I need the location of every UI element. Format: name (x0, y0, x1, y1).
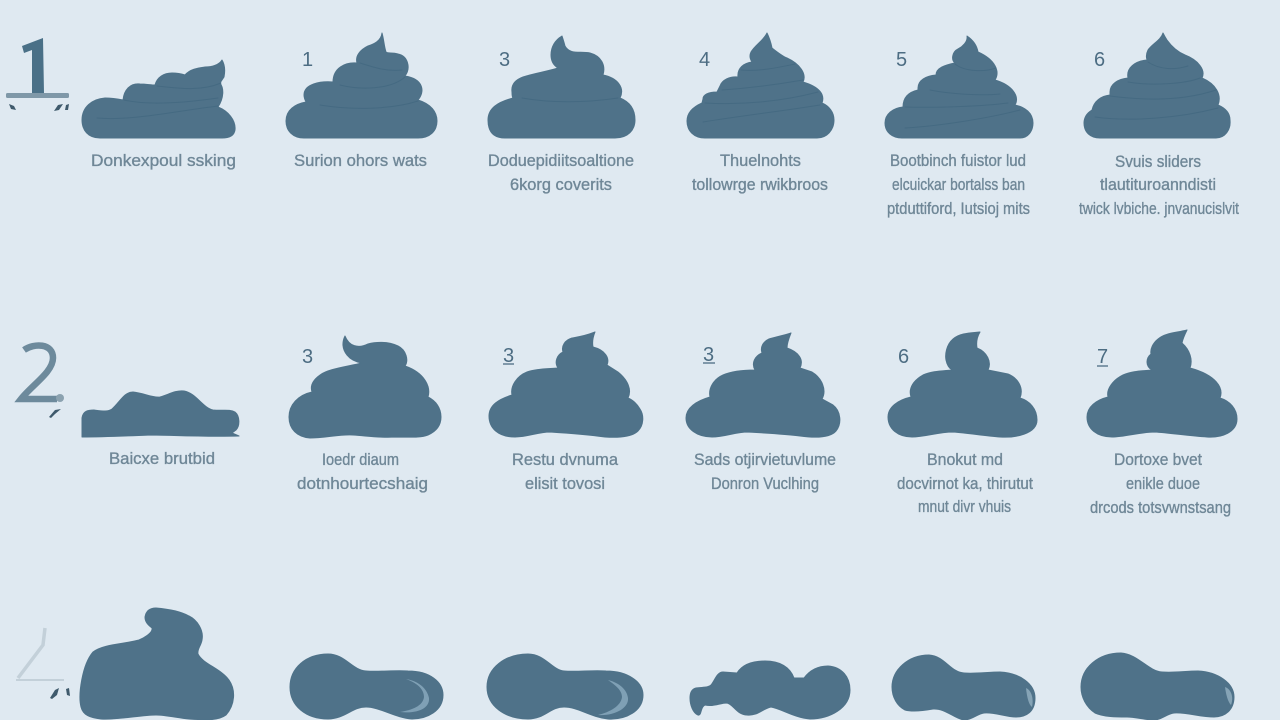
label: 6korg coverits (510, 175, 612, 194)
label (488, 151, 634, 194)
label (512, 450, 619, 493)
number: 5 (896, 49, 907, 71)
label (692, 151, 828, 194)
shape: flat mound (82, 391, 239, 437)
label: tollowrge rwikbroos (692, 175, 828, 194)
row 3 shape 1: large blob (80, 608, 234, 720)
row 3 shape 4: lumpy blob (690, 661, 850, 719)
label: enikle duoe (1126, 474, 1200, 493)
label: Baicxe brutbid (109, 449, 215, 468)
highlight (598, 680, 628, 715)
row 1 item 3 (488, 36, 635, 194)
shape: swirl (1084, 33, 1230, 138)
row 3 shape 2: dumbbell blob (290, 654, 443, 719)
shape: cloud swirl (1087, 330, 1237, 437)
label: Dortoxe bvet (1114, 450, 1202, 469)
number: 4 (699, 49, 710, 71)
highlight (1026, 688, 1033, 707)
label: Bootbinch fuistor lud (890, 151, 1026, 170)
shape: cloud swirl (289, 336, 441, 438)
label: ptduttiford, Iutsioj mits (887, 199, 1030, 218)
row 2 item 1 (82, 391, 239, 468)
row 1 item 1 (82, 60, 236, 170)
label: Bnokut md (927, 450, 1003, 469)
label: twick lvbiche. jnvanucislvit (1079, 199, 1239, 218)
label: elcuickar bortalss ban (892, 175, 1025, 194)
row 2 item 6 (1087, 330, 1237, 517)
label (1090, 450, 1231, 517)
highlight (1225, 687, 1232, 705)
label (897, 450, 1033, 516)
label: Doduepidiitsoaltione (488, 151, 634, 170)
row 1 item 6 (1079, 33, 1239, 218)
label (694, 450, 836, 493)
row 2 item 3 (489, 332, 643, 493)
label: elisit tovosi (525, 474, 605, 493)
shape: swirl (687, 33, 834, 138)
row 3 shape 5: blob with highlight (892, 655, 1035, 720)
row 2 item 5 (888, 332, 1037, 516)
label (297, 450, 428, 493)
shape: cloud swirl (686, 333, 840, 437)
label: docvirnot ka, thirutut (897, 474, 1033, 493)
label: Donron Vuclhing (711, 474, 819, 493)
number: 1 (302, 49, 313, 71)
row 1 item 2 (286, 33, 437, 170)
number: 7 (1097, 346, 1108, 368)
label: Surion ohors wats (294, 151, 427, 170)
label: dotnhourtecshaig (297, 474, 428, 493)
shape: swirl (885, 36, 1033, 138)
shape: low swirl (82, 60, 235, 138)
number: 3 (499, 49, 510, 71)
row 2 item 4 (686, 333, 840, 493)
label: drcods totsvwnstsang (1090, 498, 1231, 517)
label: Sads otjirvietuvlume (694, 450, 836, 469)
row 1 item 4 (687, 33, 834, 194)
shape: cloud swirl (489, 332, 643, 437)
row 1 marker: large number 1 (6, 38, 69, 111)
number: 3 (703, 344, 714, 366)
label: Thuelnohts (720, 151, 801, 170)
row 2 marker: large number 2 (21, 345, 64, 418)
label (887, 151, 1030, 218)
label: Ioedr diaum (322, 450, 399, 469)
label (1079, 152, 1239, 218)
highlight (400, 679, 429, 712)
row 2 item 2 (289, 336, 441, 493)
shape: swirl (488, 36, 635, 138)
label: Restu dvnuma (512, 450, 619, 469)
shape: cloud swirl (888, 332, 1037, 437)
label: Svuis sliders (1115, 152, 1201, 171)
label: Donkexpoul ssking (91, 151, 236, 170)
row 3 shape 6: blob with highlight (1081, 653, 1234, 720)
number: 3 (302, 346, 313, 368)
label: mnut divr vhuis (918, 497, 1011, 516)
number: 6 (1094, 49, 1105, 71)
row 3 marker: faint number (16, 628, 70, 699)
row 3 shape 3: dumbbell blob (487, 654, 643, 719)
label: tlautituroanndisti (1100, 175, 1216, 194)
number: 6 (898, 346, 909, 368)
number: 3 (503, 345, 514, 367)
row 1 item 5 (885, 36, 1033, 218)
shape: swirl (286, 33, 437, 138)
